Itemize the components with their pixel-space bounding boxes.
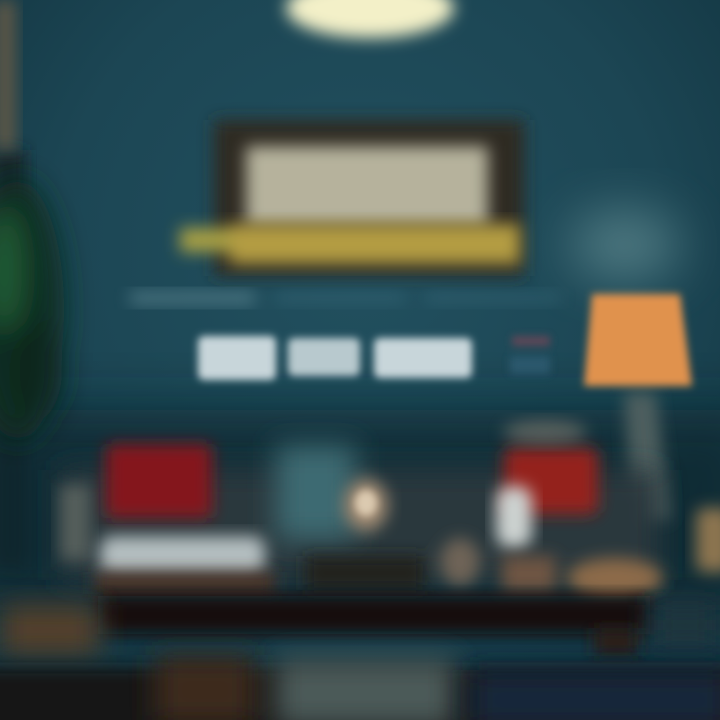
floor bbox=[0, 605, 720, 720]
sign panel bbox=[246, 146, 488, 226]
table lamp bbox=[584, 294, 692, 520]
bright headline block bbox=[198, 336, 472, 380]
sofa back bbox=[60, 470, 660, 580]
white bottle bbox=[496, 486, 532, 548]
faint subtitle text block bbox=[130, 291, 560, 305]
lamp shade bbox=[584, 294, 692, 386]
framed sign bbox=[180, 120, 524, 276]
red pillow right bbox=[504, 448, 598, 514]
red pillow left bbox=[106, 444, 212, 518]
coffee table bbox=[95, 538, 663, 656]
sofa bbox=[60, 420, 660, 580]
lamp base bbox=[624, 392, 670, 520]
plant bbox=[0, 180, 64, 440]
table items bbox=[95, 538, 663, 598]
small round lamp bbox=[344, 479, 388, 531]
teal cushion bbox=[276, 445, 356, 540]
table top bbox=[98, 596, 650, 634]
side object bbox=[696, 508, 720, 572]
frame bbox=[214, 120, 524, 276]
white cushion bbox=[100, 536, 265, 576]
ceiling lamp bbox=[286, 0, 454, 38]
yellow banner bbox=[180, 224, 520, 264]
small red and blue mark bbox=[510, 336, 550, 374]
left armrest bbox=[60, 485, 90, 560]
